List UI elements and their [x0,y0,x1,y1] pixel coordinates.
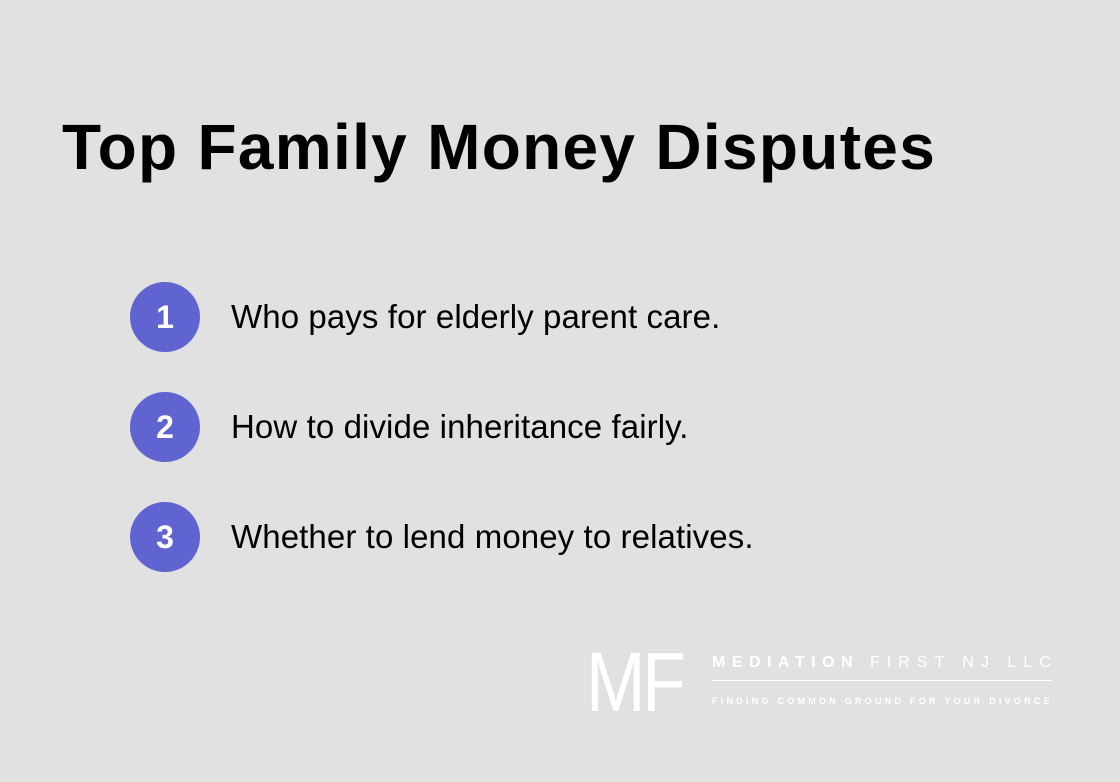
item 2 [130,392,689,462]
logo [586,635,1058,729]
logo name: MEDIATION FIRST NJ LLC [712,654,1058,671]
tagline: FINDING COMMON GROUND FOR YOUR DIVORCE [712,696,1053,706]
logo mark MF: MF [586,635,682,729]
item 3 [130,502,754,572]
badge 1: 1 [156,299,174,335]
text 2: How to divide inheritance fairly. [231,408,689,445]
badge 2: 2 [156,409,174,445]
badge 1 [130,282,200,352]
badge 3: 3 [156,519,174,555]
badge 2 [130,392,200,462]
item 1 [130,282,720,352]
text 1: Who pays for elderly parent care. [231,298,720,335]
text 3: Whether to lend money to relatives. [231,518,754,555]
title: Top Family Money Disputes [62,111,936,183]
badge 3 [130,502,200,572]
